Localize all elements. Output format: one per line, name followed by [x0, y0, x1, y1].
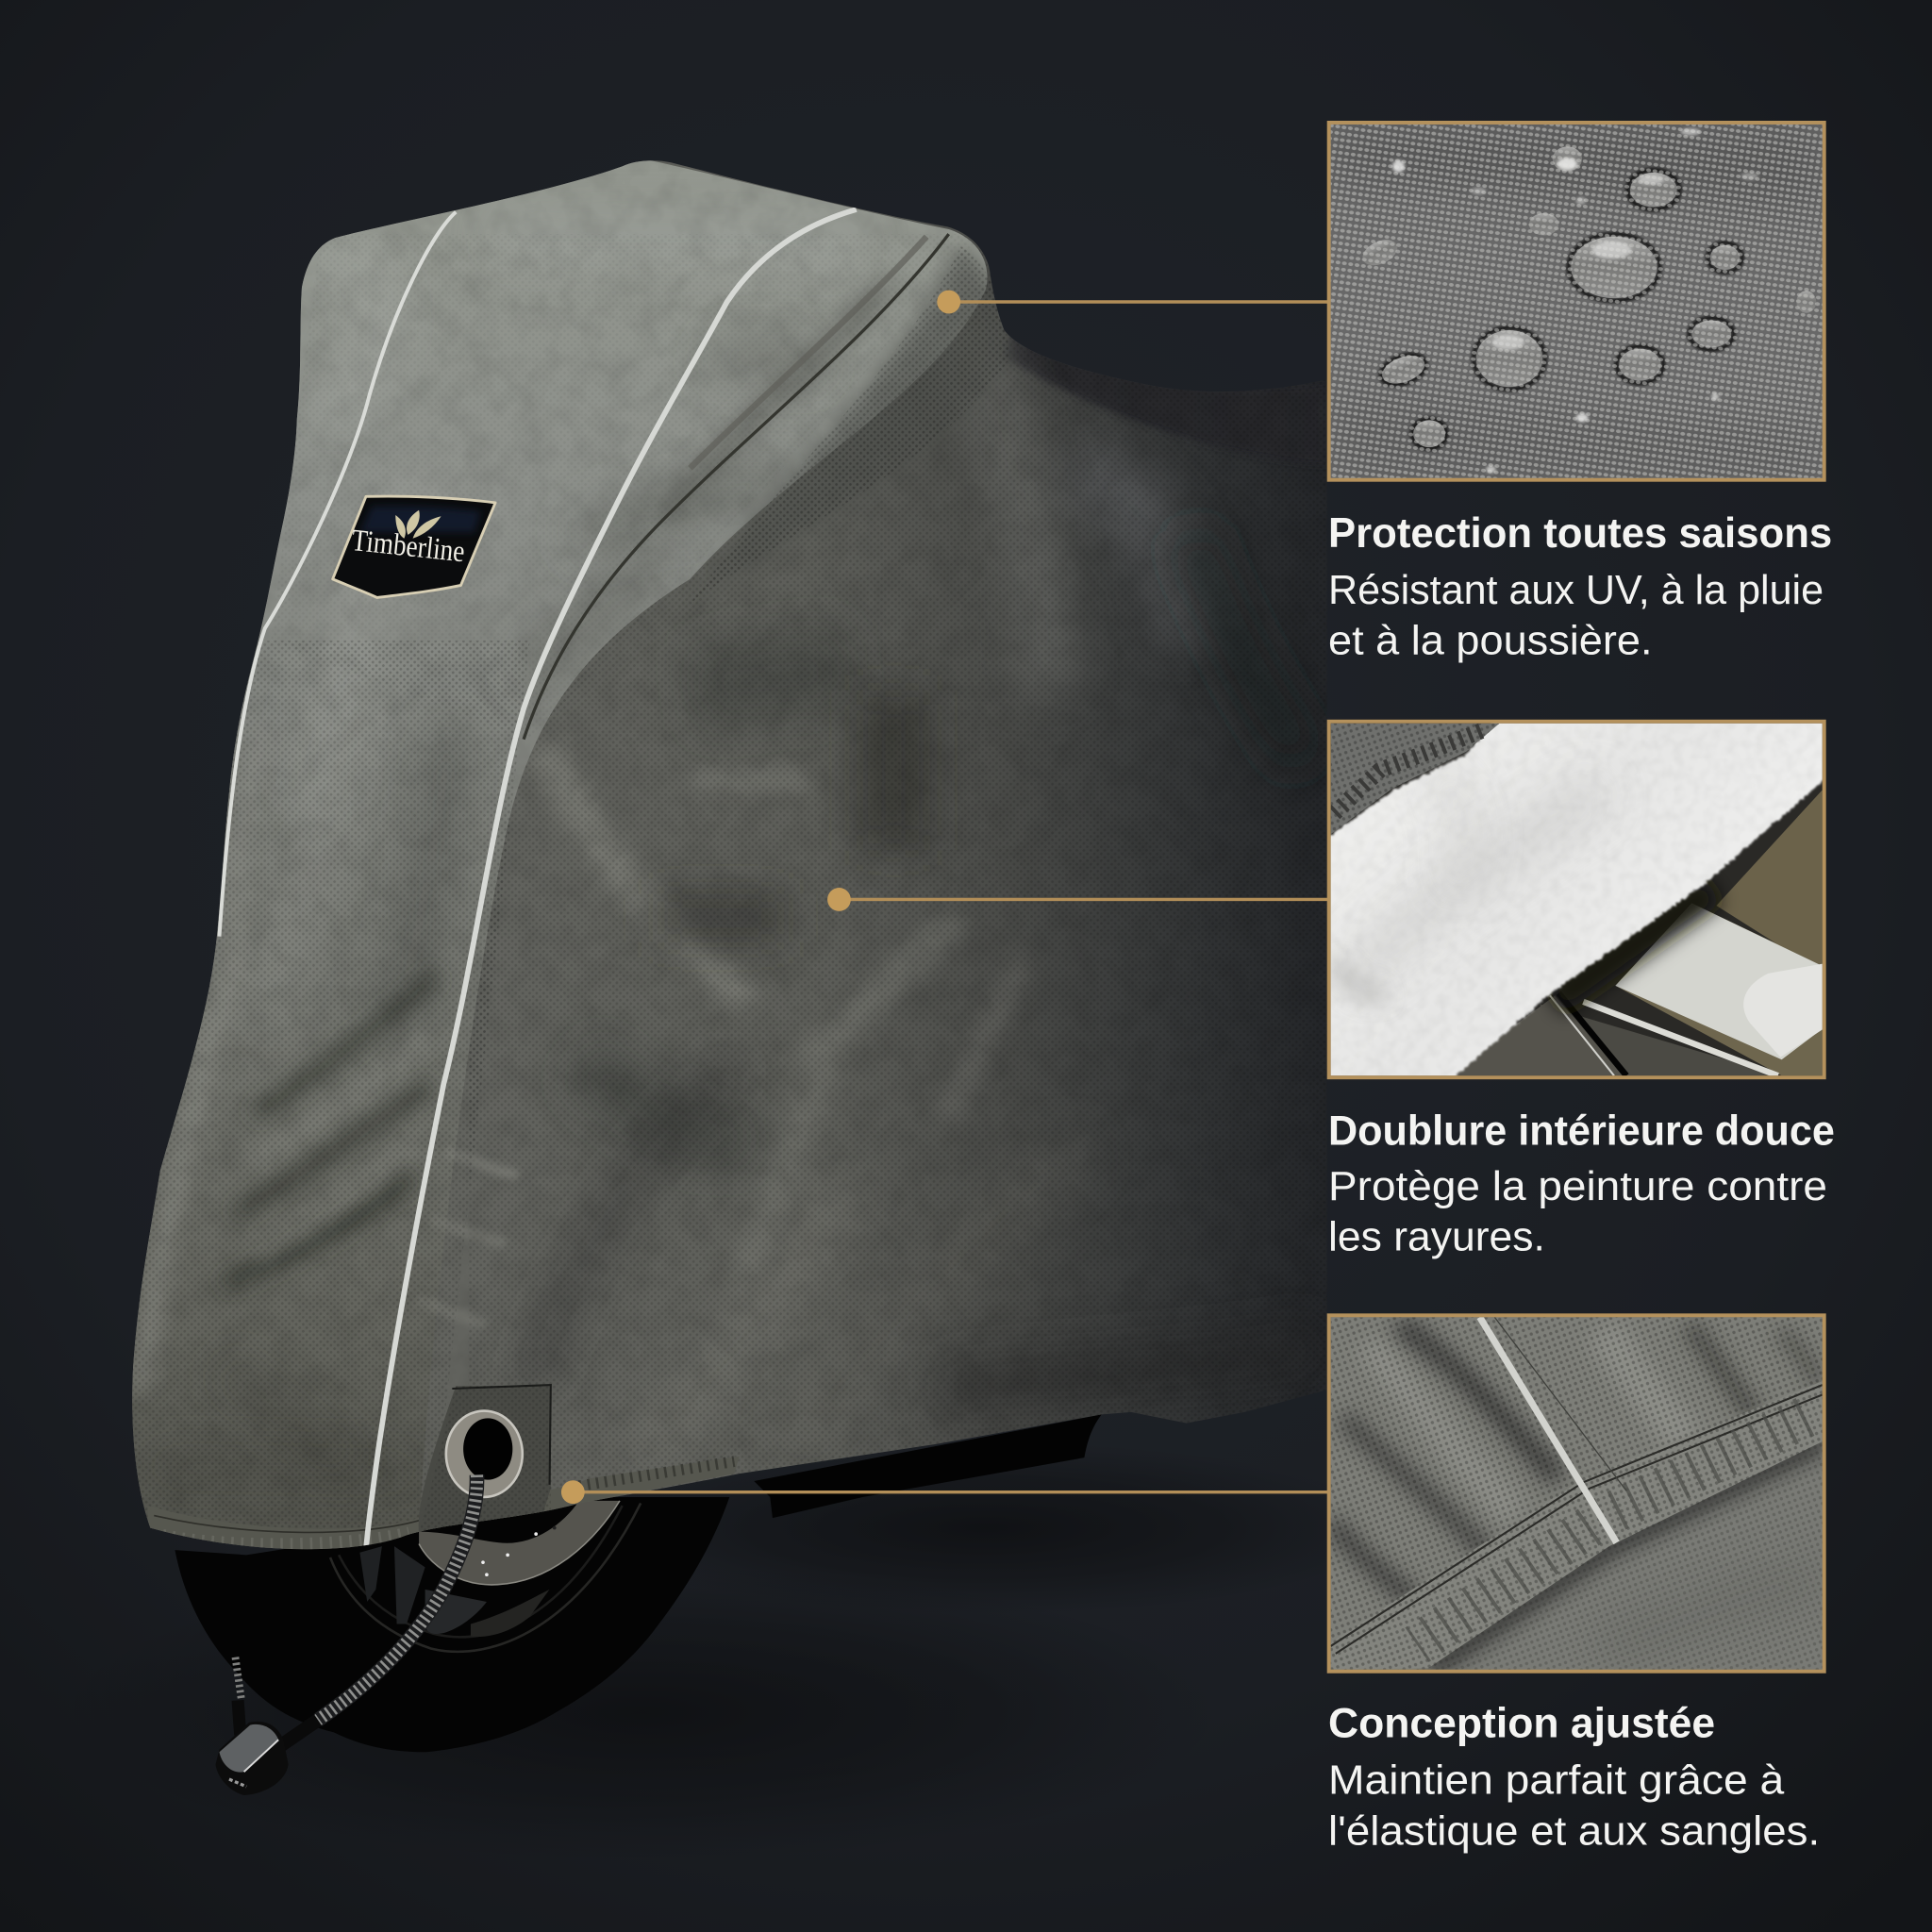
panel 1 title: Protection toutes saisons	[1328, 510, 1832, 557]
front panel	[124, 148, 988, 1565]
floor shadow	[61, 1441, 1392, 1860]
front weave	[124, 641, 530, 1541]
underbody shadow piece	[754, 1414, 1102, 1518]
panel: fitted elastic hem	[1329, 1315, 1824, 1672]
panel 1 description	[1328, 567, 1824, 664]
fleece	[1319, 715, 1836, 1084]
badge wordmark: Timberline	[350, 524, 466, 569]
elastic edge	[1331, 724, 1500, 834]
front panel folds	[142, 234, 887, 1473]
panel 3 description	[1328, 1757, 1820, 1854]
reflective piping main	[366, 209, 857, 1550]
badge leaves	[395, 510, 441, 539]
left edge highlight	[142, 961, 234, 1392]
upper fabric folds	[1398, 1324, 1558, 1478]
mesh shoulder	[690, 246, 1010, 604]
panel 2 description: Protège la peinture contre	[1328, 1163, 1827, 1209]
panel seam darker line	[524, 234, 949, 740]
reflective piping left	[219, 212, 456, 937]
front wheel	[175, 1497, 729, 1752]
fabric mottling	[124, 148, 1331, 1565]
panel: soft inner lining	[1319, 715, 1836, 1084]
security cable	[235, 1474, 477, 1747]
elastic band	[1331, 1381, 1823, 1670]
tyre	[175, 1497, 729, 1752]
reinforcement patch	[419, 1385, 551, 1534]
callout 1 connector	[937, 291, 1328, 313]
panel 2 title: Doublure intérieure douce	[1328, 1108, 1835, 1154]
right-of-piping folds	[416, 1152, 518, 1324]
elastic hem	[148, 1457, 740, 1550]
droplet shadows	[1376, 170, 1742, 448]
motorcycle cover	[124, 148, 1343, 1565]
reflective strip	[1480, 1317, 1617, 1542]
panel: water droplets on fabric	[1329, 123, 1824, 480]
side panel base	[124, 148, 1343, 1565]
panel 1 description: et à la poussière.	[1328, 618, 1653, 664]
panel 1 description: Résistant aux UV, à la pluie	[1328, 567, 1824, 613]
side panel shading	[530, 308, 1327, 1454]
side weave	[470, 247, 1196, 1494]
padlock	[216, 1722, 289, 1795]
rim rings	[330, 1503, 641, 1652]
droplets	[1358, 146, 1816, 447]
painted bodywork	[1331, 724, 1823, 1075]
spokes	[359, 1546, 382, 1602]
lower fabric	[1429, 1441, 1823, 1670]
panel 3 title: Conception ajustée	[1328, 1701, 1715, 1747]
brake disc	[419, 1501, 620, 1585]
panel 3 description: Maintien parfait grâce à	[1328, 1757, 1785, 1804]
panel 3 description: l'élastique et aux sangles.	[1328, 1807, 1820, 1854]
panel 2 description	[1328, 1163, 1827, 1260]
panel 2 description: les rayures.	[1328, 1214, 1545, 1260]
grommet	[446, 1411, 523, 1497]
callout 2 connector	[827, 888, 1328, 911]
callout 3 connector	[561, 1480, 1328, 1504]
badge: Timberline	[333, 496, 495, 597]
diagonal compression folds	[253, 974, 438, 1115]
